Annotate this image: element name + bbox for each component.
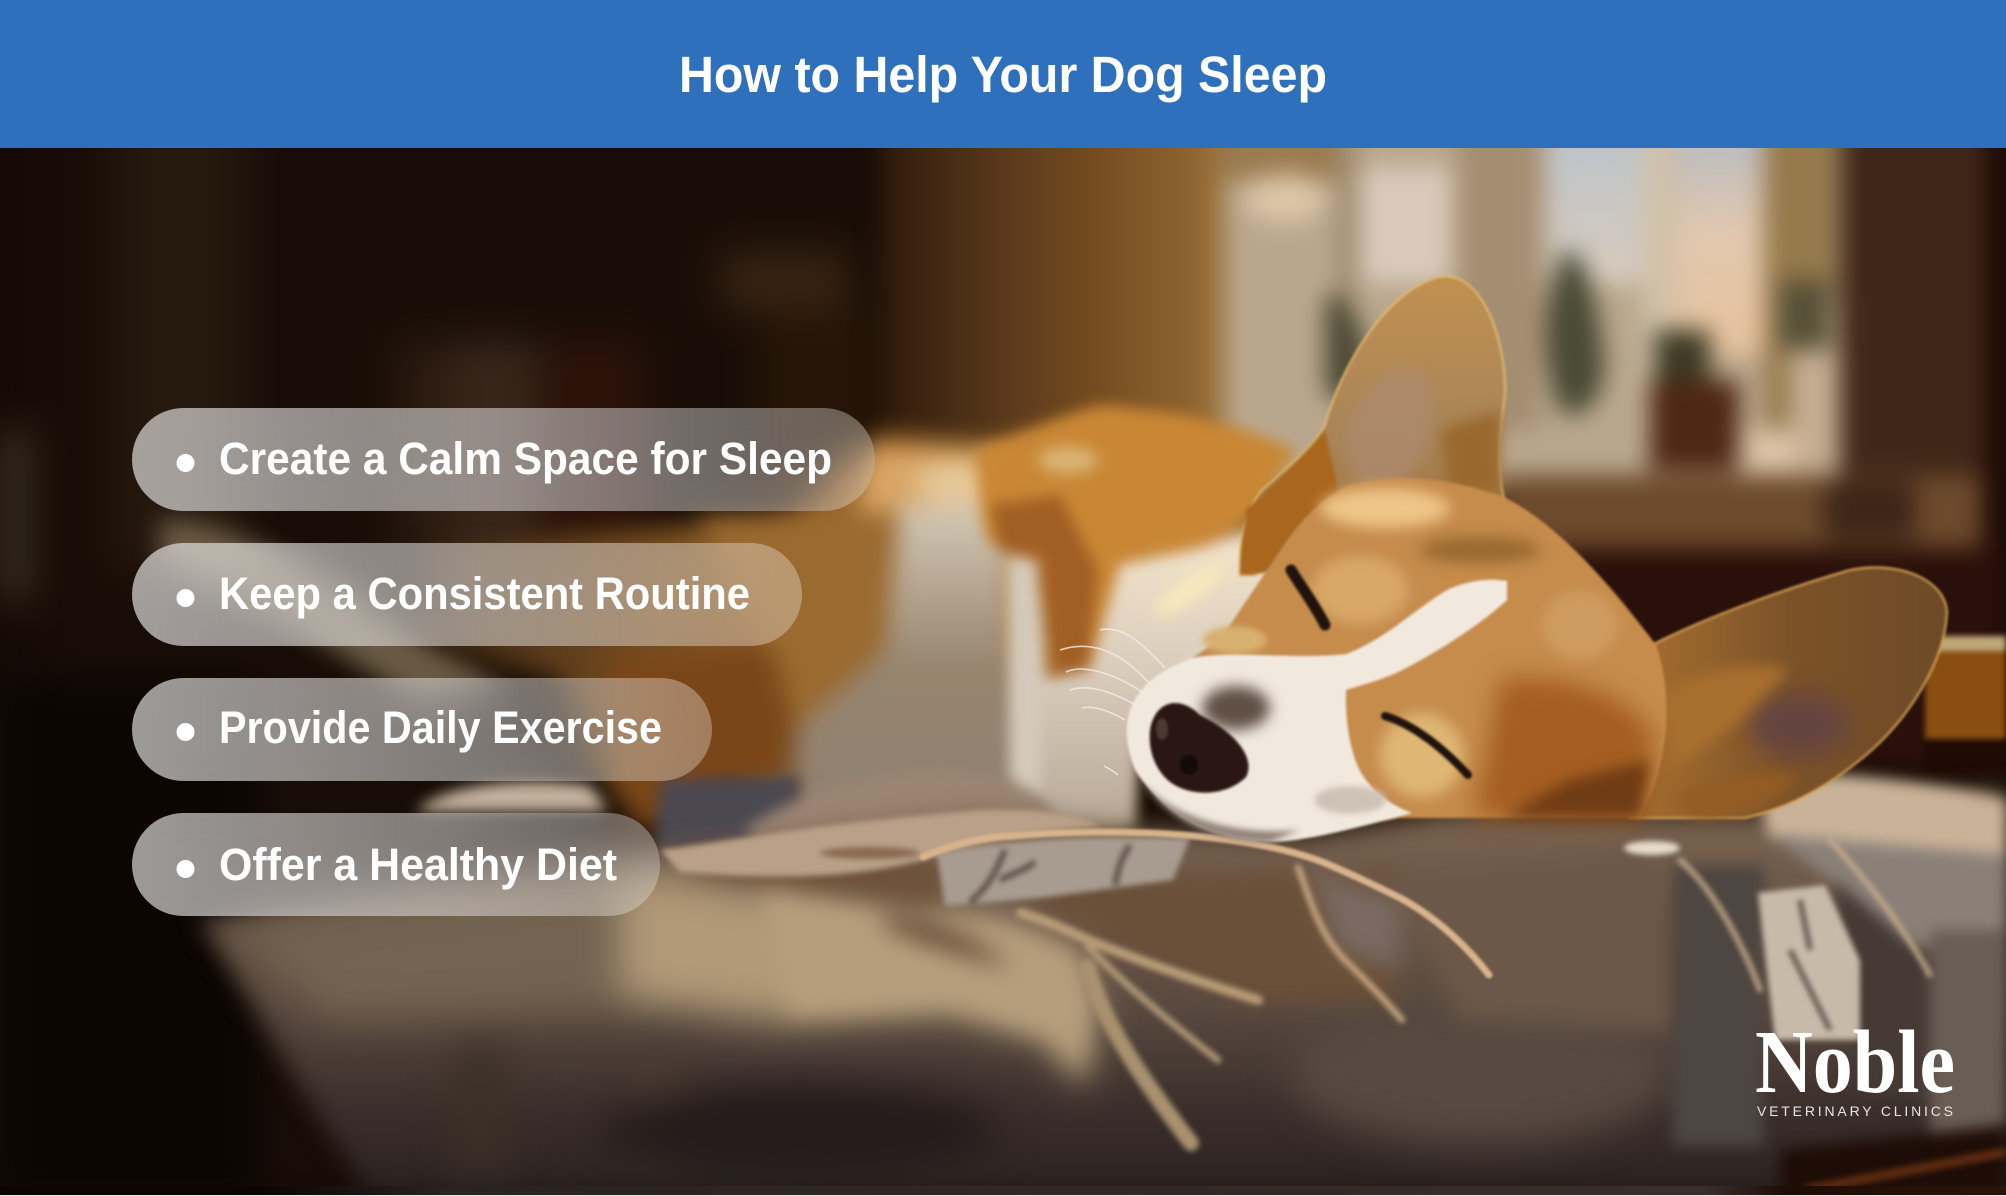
pillow base [200,790,2006,1196]
list item: Keep a Consistent Routine: Keep a Consistent Routine [219,568,750,619]
logo: Noble Veterinary Clinics: VETERINARY CLINICS [1757,1103,1953,1119]
dog nose [1150,703,1249,793]
list item: Create a Calm Space for Sleep: Create a Calm Space for Sleep [219,433,832,484]
wooden bed frame behind the right ear [1925,636,2006,771]
closed eye, lower [1385,716,1468,775]
floral patch and towel at the pillow top [660,810,1190,906]
closed eye, upper [1291,570,1325,625]
dog shoulder fur: orange patch and white ruff [975,407,1310,830]
white blaze and muzzle [1127,580,1507,842]
paws and blue shadow [416,769,1060,850]
title: How to Help Your Dog Sleep [679,46,1327,103]
dog head [1127,478,1667,842]
blurred pale blanket behind the dog [160,520,510,705]
list item: Offer a Healthy Diet [132,813,660,916]
list item: Offer a Healthy Diet: Offer a Healthy Diet [219,839,617,890]
dog ear, upright [1240,276,1505,575]
dog ear, folded right [1630,567,1947,818]
header banner [0,0,2006,148]
dog whiskers [1060,629,1165,775]
list item: Keep a Consistent Routine [132,543,802,646]
pillow soft light patches [235,865,1670,1180]
list item: Provide Daily Exercise [132,678,712,781]
floral print and bright spot on the right of the pillow [1624,841,2006,1190]
pillow lit folds [700,850,1680,1080]
curtain, window and sill [880,100,2006,768]
list item: Provide Daily Exercise: Provide Daily Exercise [219,702,662,753]
logo: Noble Veterinary Clinics: Noble [1755,1015,1955,1112]
pillow light streaks [923,832,1930,1143]
bottom edge line [0,1195,2006,1196]
pillow right side and cushion [1672,772,2006,1196]
list item: Create a Calm Space for Sleep [132,408,875,511]
dog body, soft rear part [420,410,1120,840]
bottom edge of the photo [0,1186,2006,1195]
